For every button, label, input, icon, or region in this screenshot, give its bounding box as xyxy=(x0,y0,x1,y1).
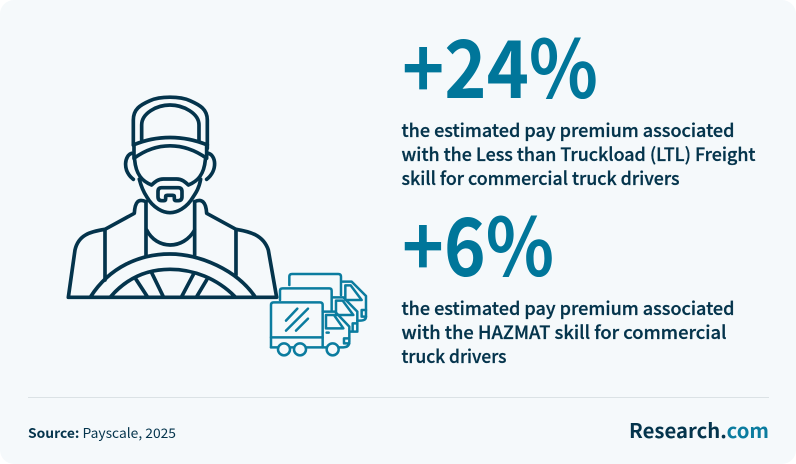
icon: fleet of delivery trucks xyxy=(271,274,366,355)
text block: HAZMAT description xyxy=(402,295,734,369)
logo: Research.com: Research.com xyxy=(629,415,769,444)
text block: HAZMAT description: with the HAZMAT skill for commercial xyxy=(402,319,726,345)
text block: LTL freight description: the estimated pay premium associated xyxy=(402,117,734,143)
text block: HAZMAT description: truck drivers xyxy=(402,343,506,369)
icon: truck driver at steering wheel xyxy=(68,97,277,297)
stat: +6%: +6% xyxy=(402,184,554,300)
text block: HAZMAT description: the estimated pay premium associated xyxy=(402,295,734,321)
text block: LTL freight description xyxy=(402,117,756,191)
text block: LTL freight description: skill for commercial truck drivers xyxy=(402,165,680,191)
stat: +24%: +24% xyxy=(402,6,598,122)
text block: LTL freight description: with the Less than Truckload (LTL) Freight xyxy=(402,141,756,167)
source note: Source: Payscale, 2025 xyxy=(28,422,176,442)
